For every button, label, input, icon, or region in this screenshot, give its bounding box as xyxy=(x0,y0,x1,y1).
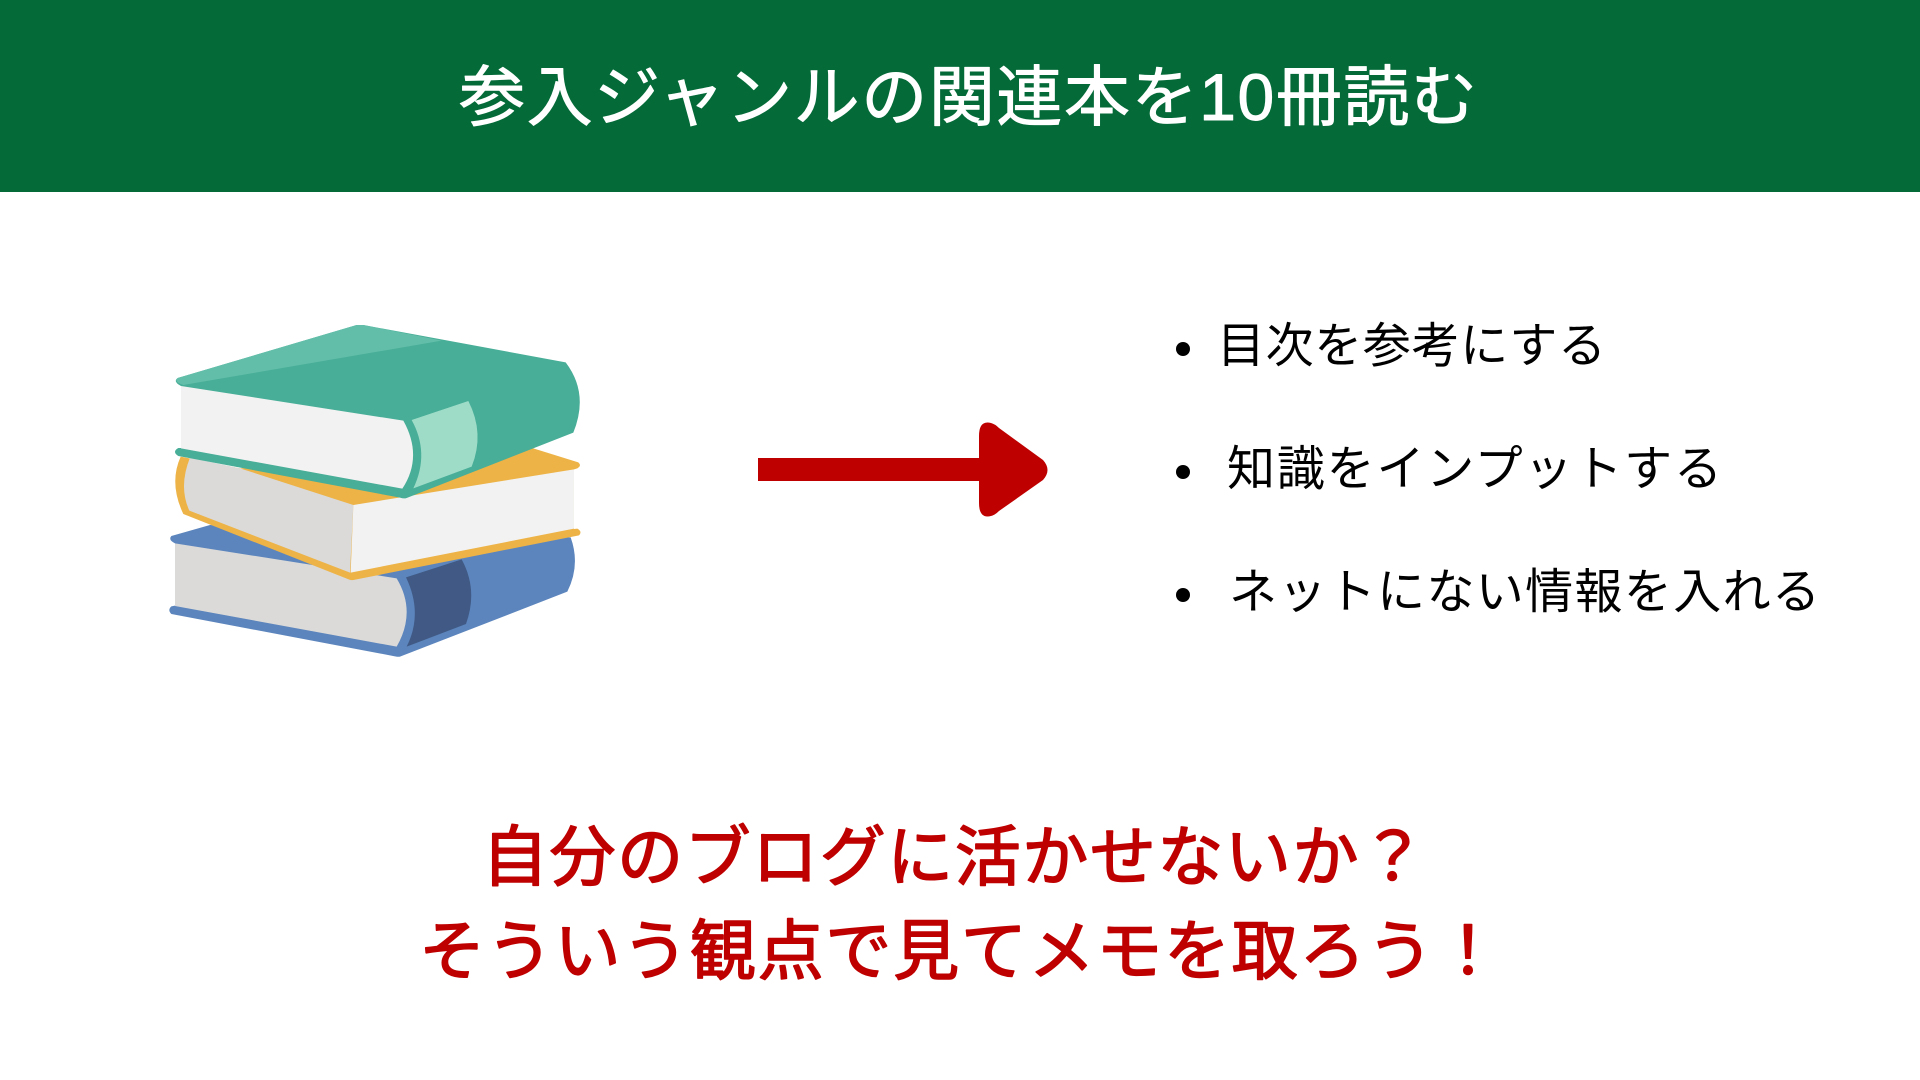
book: blue bottom xyxy=(169,525,575,657)
bullet list xyxy=(1176,320,1820,619)
callout line 1: 自分のブログに活かせないか？ xyxy=(482,820,1426,894)
bullet item 3: ネットにない情報を入れる xyxy=(1229,566,1820,619)
callout text xyxy=(419,820,1501,988)
header band xyxy=(0,0,1920,192)
callout line 2: そういう観点で見てメモを取ろう！ xyxy=(419,914,1501,988)
book: green top xyxy=(175,325,580,498)
bullet item 1: 目次を参考にする xyxy=(1217,320,1606,373)
title: 参入ジャンルの関連本を10冊読む xyxy=(459,60,1477,134)
icon: stack of books xyxy=(169,325,580,657)
arrow xyxy=(758,423,1048,516)
book: yellow middle xyxy=(175,448,580,580)
bullet item 2: 知識をインプットする xyxy=(1227,443,1722,496)
